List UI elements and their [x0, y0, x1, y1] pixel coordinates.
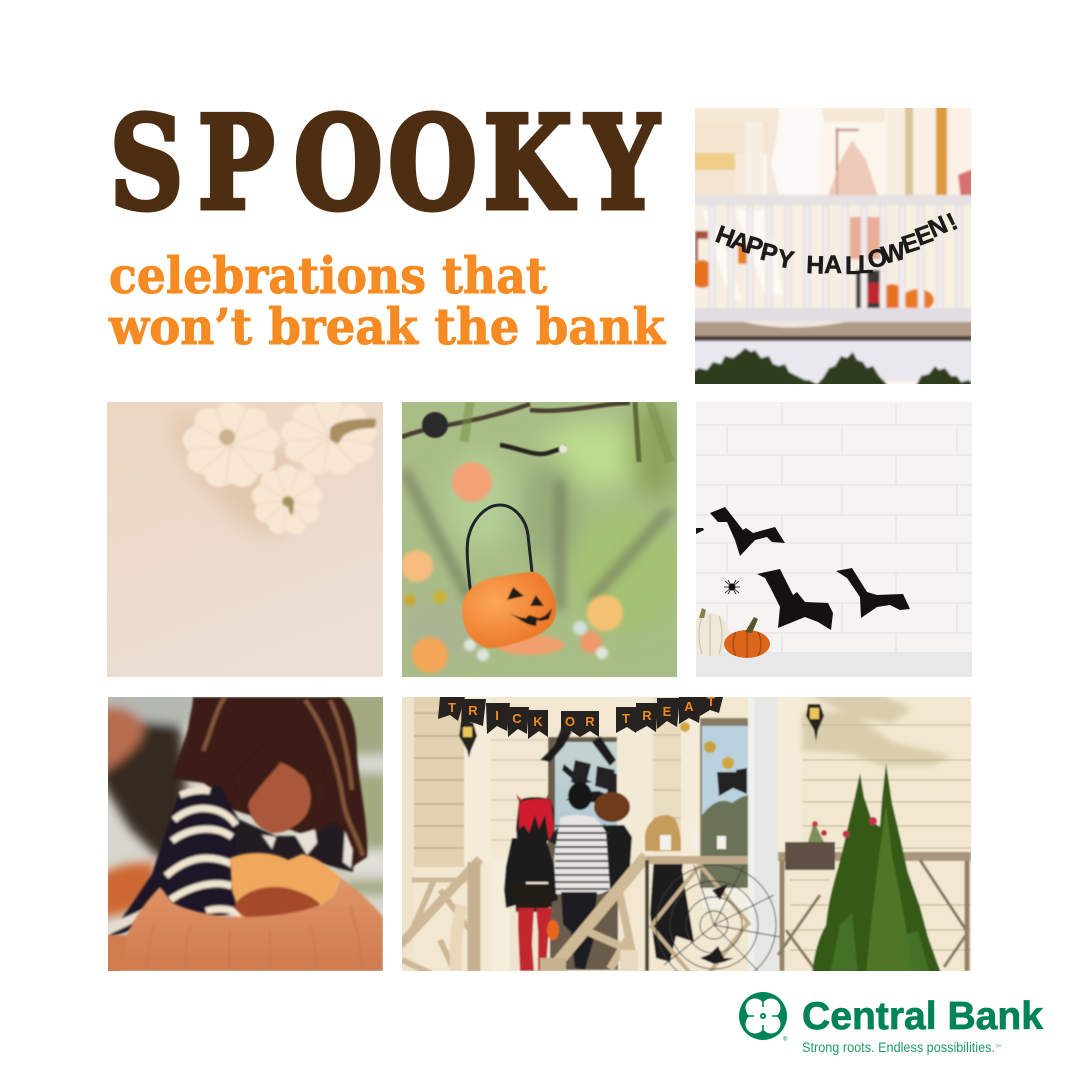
right railing — [778, 852, 971, 861]
bunting: TRICK OR TREAT: A — [684, 699, 694, 714]
lanterns — [459, 722, 477, 758]
bushes — [685, 348, 981, 422]
photo: jack-o-lantern pail hanging in tree — [402, 402, 677, 677]
bunting: TRICK OR TREAT: T — [622, 711, 630, 726]
stars — [680, 722, 690, 732]
bunting: TRICK OR TREAT: R — [468, 703, 478, 718]
spider web — [656, 865, 780, 985]
child in devil wig — [504, 794, 558, 971]
pumpkins on shelf — [691, 608, 770, 658]
child with blonde hair — [645, 815, 694, 962]
blurred orange baubles — [401, 462, 623, 673]
pail handle — [467, 505, 532, 597]
child in striped shirt — [547, 782, 610, 970]
striped arm — [108, 786, 353, 938]
pumpkin — [100, 853, 383, 975]
pumpkins — [180, 398, 380, 537]
child with curly hair — [594, 792, 632, 895]
wicker planter and flowers — [785, 842, 835, 870]
spider — [728, 584, 736, 590]
bats — [696, 507, 910, 630]
logo: Central Bank: ® — [783, 1036, 788, 1043]
door bats and bunting — [540, 726, 617, 803]
bunting: TRICK OR TREAT: C — [512, 711, 522, 726]
logo: Central Bank: TM — [995, 1043, 1001, 1048]
photo: Happy Halloween porch banner — [695, 108, 971, 384]
walls — [395, 690, 980, 980]
tagline: Strong roots. Endless possibilities. — [802, 1039, 995, 1055]
bunting: TRICK OR TREAT: E — [663, 704, 672, 719]
bunting: TRICK OR TREAT: K — [533, 714, 543, 729]
bunting: TRICK OR TREAT: T — [448, 700, 456, 715]
face — [248, 762, 311, 833]
bunting: TRICK OR TREAT: R — [585, 714, 595, 729]
bunting: TRICK OR TREAT: I — [495, 708, 499, 723]
photo: girl carving a pumpkin — [108, 697, 383, 971]
photo: white pumpkins on cream — [107, 402, 383, 677]
bunting: TRICK OR TREAT — [438, 694, 723, 739]
mid stair railing — [540, 856, 646, 971]
branch — [402, 402, 670, 462]
icon: dogwood flower — [739, 992, 787, 1040]
candles — [660, 835, 671, 850]
evergreen tree — [812, 763, 942, 975]
wordmark: Central Bank — [802, 995, 1043, 1038]
hair — [173, 697, 367, 869]
bunting: TRICK OR TREAT: R — [642, 708, 652, 723]
railing — [685, 195, 981, 322]
photo: kids trick-or-treating on a porch — [402, 697, 971, 971]
bricks — [696, 402, 972, 652]
banner text: HAPPY HALLOWEEN! — [712, 208, 962, 280]
bunting: TRICK OR TREAT: O — [565, 714, 575, 729]
pumpkin pail — [462, 572, 556, 648]
subtitle: celebrations that won't break the bank — [108, 248, 666, 354]
rails — [400, 859, 480, 974]
photo: paper bats on white brick wall — [696, 402, 972, 677]
logo: Central Bank — [739, 992, 1044, 1055]
